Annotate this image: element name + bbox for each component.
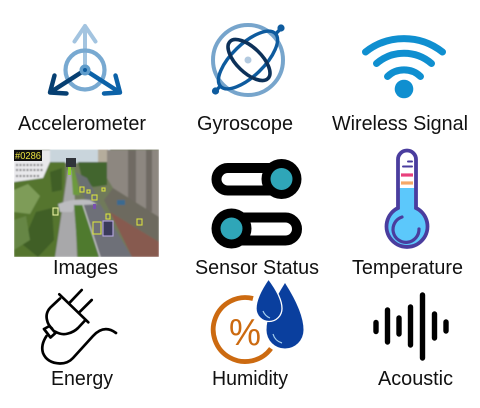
label: Acoustic: Acoustic bbox=[378, 368, 453, 390]
image: aerial street photo bbox=[14, 149, 159, 257]
label: Sensor Status: Sensor Status bbox=[195, 257, 319, 279]
label: Wireless Signal: Wireless Signal bbox=[332, 113, 468, 135]
panel: energy bbox=[42, 290, 116, 390]
label: Temperature: Temperature bbox=[352, 257, 463, 279]
label: Humidity: Humidity bbox=[212, 368, 288, 390]
label: frame number: #0286 bbox=[15, 151, 41, 162]
icon: sound waveform bbox=[376, 295, 446, 358]
icon: accelerometer bbox=[50, 26, 120, 94]
panel: wireless signal bbox=[332, 39, 468, 135]
panel: acoustic bbox=[376, 295, 453, 390]
icon: gyroscope bbox=[210, 22, 286, 98]
label: percent sign: % bbox=[229, 312, 261, 354]
label: Images: Images bbox=[53, 257, 118, 279]
panel: temperature bbox=[352, 151, 463, 279]
label: Gyroscope: Gyroscope bbox=[197, 113, 293, 135]
icon: plug with cord bbox=[42, 290, 116, 364]
panel: humidity bbox=[212, 279, 304, 390]
panel: images bbox=[14, 149, 159, 279]
panel: accelerometer bbox=[18, 26, 146, 135]
icon: toggle switches bbox=[212, 159, 302, 248]
label: Energy: Energy bbox=[51, 368, 113, 390]
icon: wifi signal bbox=[366, 39, 442, 98]
label: Accelerometer: Accelerometer bbox=[18, 113, 146, 135]
panel: gyroscope bbox=[197, 22, 293, 135]
icon: thermometer bbox=[386, 151, 427, 247]
panel: sensor status bbox=[195, 159, 319, 279]
